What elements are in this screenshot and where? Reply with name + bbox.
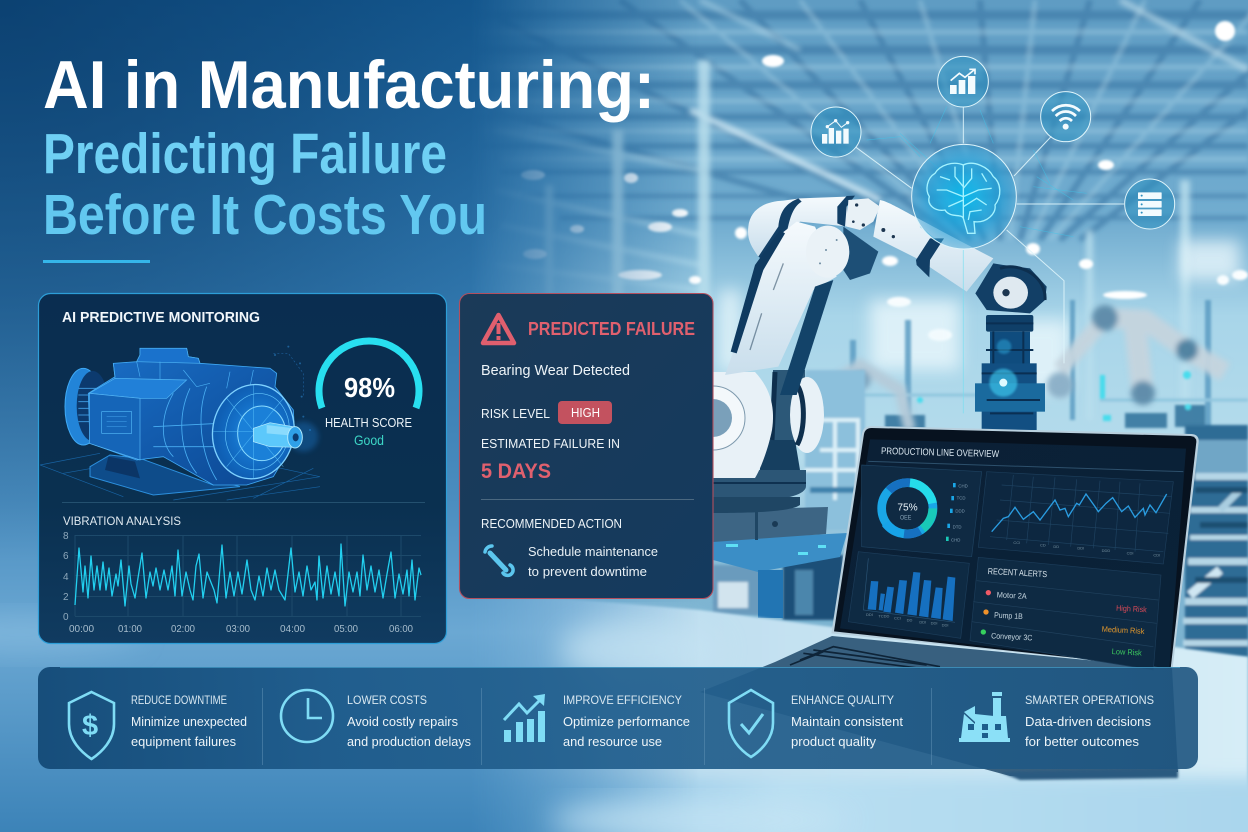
recommended action: Schedule maintenance — [528, 544, 658, 559]
recommended action — [481, 516, 658, 579]
icon: wrench — [485, 546, 513, 575]
icon: factory — [959, 692, 1010, 742]
laptop — [700, 426, 1199, 780]
benefit: lower costs: and production delays — [347, 734, 471, 749]
recent alerts: RECENT ALERTS — [988, 566, 1048, 579]
brain hub — [912, 144, 1016, 249]
y axis labels: 2 — [63, 592, 69, 603]
recent alerts: Medium Risk — [1102, 625, 1145, 636]
benefit: reduce downtime: Minimize unexpected — [131, 714, 247, 729]
estimated failure: ESTIMATED FAILURE IN — [481, 436, 620, 451]
background robots, blurred — [830, 305, 1225, 430]
benefit: reduce downtime — [69, 692, 247, 759]
benefit: lower costs — [281, 690, 471, 749]
title line 3: Before It Costs You — [43, 183, 487, 247]
recent alerts — [970, 557, 1161, 670]
line chart: CD — [1040, 543, 1046, 548]
health gauge: HEALTH SCORE — [325, 415, 412, 430]
line chart: CDI — [1153, 553, 1160, 558]
connector lines — [856, 107, 1124, 413]
y axis labels — [63, 531, 69, 623]
line chart: CCI — [1013, 540, 1020, 545]
bar chart: DD — [907, 617, 913, 622]
recent alerts: Motor 2A — [997, 590, 1028, 601]
benefit: smarter operations: for better outcomes — [1025, 734, 1140, 749]
motor housing — [88, 348, 295, 485]
panel: benefits bar — [38, 667, 1198, 769]
benefit: smarter operations: Data-driven decisions — [1025, 714, 1151, 729]
estimated failure: 5 DAYS — [481, 460, 551, 483]
bar chart — [848, 552, 969, 638]
x axis labels: 00:00 — [69, 623, 94, 635]
benefit: improve efficiency: Optimize performance — [563, 714, 690, 729]
ceiling and floor lights — [521, 21, 1248, 341]
line chart: DDD — [1102, 548, 1110, 553]
screen heading: PRODUCTION LINE OVERVIEW — [881, 446, 1000, 460]
bar chart: DDI — [866, 612, 873, 617]
recent alerts: Conveyor 3C — [991, 631, 1033, 643]
robot wrist — [975, 263, 1047, 313]
x axis labels: 01:00 — [118, 623, 142, 635]
ceiling structure — [470, 0, 1248, 240]
vibration signal — [75, 544, 421, 606]
donut panel: DDD — [955, 509, 965, 514]
failure type: Bearing Wear Detected — [481, 363, 630, 379]
y axis labels: 6 — [63, 551, 69, 562]
panel heading: AI PREDICTIVE MONITORING — [62, 310, 260, 326]
benefit: enhance quality — [729, 690, 903, 757]
title line 1: AI in Manufacturing: — [43, 47, 655, 123]
node: server — [1125, 179, 1175, 229]
node: top chart — [938, 56, 988, 107]
y axis labels: 8 — [63, 531, 69, 542]
robot column — [975, 315, 1045, 430]
robot pedestal — [681, 370, 847, 618]
node: left chart — [811, 107, 861, 157]
donut panel: DTD — [953, 525, 962, 530]
line chart: DD — [1053, 544, 1059, 549]
y axis labels: 4 — [63, 572, 69, 583]
table top — [0, 575, 1248, 832]
machinery behind laptop — [713, 370, 865, 620]
mid floor structures — [830, 300, 1248, 430]
panel: AI predictive monitoring — [38, 294, 446, 644]
alert heading: PREDICTED FAILURE — [528, 319, 695, 339]
robot elbow joint — [806, 226, 878, 280]
risk level: HIGH — [571, 405, 600, 420]
conveyors, right of laptop — [1183, 425, 1248, 657]
left gradient overlay — [0, 0, 760, 832]
line chart — [978, 472, 1173, 564]
robot shoulder — [748, 196, 855, 260]
x axis labels — [69, 623, 413, 635]
recommended action: RECOMMENDED ACTION — [481, 516, 622, 531]
motor flange — [205, 378, 302, 485]
benefit: lower costs: LOWER COSTS — [347, 693, 427, 707]
x axis labels: 05:00 — [334, 623, 358, 635]
motor base — [90, 455, 240, 495]
laptop base — [700, 636, 1178, 776]
title line 2: Predicting Failure — [43, 122, 447, 186]
donut panel: CHD — [951, 537, 960, 542]
vibration chart — [63, 514, 421, 635]
benefit: enhance quality: ENHANCE QUALITY — [791, 693, 894, 707]
icon: clock — [281, 690, 333, 742]
recommended action: to prevent downtime — [528, 564, 647, 579]
panel: predicted failure — [460, 294, 713, 598]
x axis labels: 06:00 — [389, 623, 413, 635]
recent alerts: Low Risk — [1112, 647, 1142, 658]
x axis labels: 03:00 — [226, 623, 250, 635]
risk level: RISK LEVEL — [481, 406, 550, 421]
health gauge — [319, 341, 419, 448]
donut panel: OEE — [900, 516, 911, 522]
motor shaft — [253, 423, 297, 447]
benefit: improve efficiency: and resource use — [563, 734, 662, 749]
node: wifi — [1041, 92, 1091, 142]
benefit: enhance quality: Maintain consistent — [791, 714, 903, 729]
donut panel: TCD — [957, 495, 966, 500]
AI network diagram — [811, 56, 1175, 413]
motor end cap — [65, 368, 113, 445]
bar chart: DDI — [919, 619, 926, 624]
robot upright arm — [725, 222, 837, 395]
robot arm — [725, 196, 1047, 430]
benefit: reduce downtime: equipment failures — [131, 734, 236, 749]
benefit: smarter operations — [959, 692, 1154, 749]
benefit: improve efficiency: IMPROVE EFFICIENCY — [563, 693, 682, 707]
recent alerts: Pump 1B — [994, 611, 1023, 621]
line chart: DDI — [1077, 545, 1084, 550]
recent alerts: High Risk — [1116, 604, 1147, 614]
risk level — [481, 401, 612, 424]
health gauge: Good — [354, 433, 384, 448]
icon: shield check — [729, 690, 773, 757]
line chart: CDI — [1127, 551, 1134, 556]
estimated failure — [481, 436, 620, 483]
chart heading: VIBRATION ANALYSIS — [63, 514, 181, 528]
bar chart: DDI — [942, 623, 949, 628]
laptop keyboard — [790, 647, 940, 668]
icon: shield dollar — [69, 692, 114, 759]
health gauge: 98% — [344, 372, 395, 403]
benefit: improve efficiency — [504, 693, 690, 749]
bar chart: CCI — [894, 615, 901, 620]
donut panel — [862, 465, 982, 557]
benefit: reduce downtime: REDUCE DOWNTIME — [131, 693, 227, 707]
title — [43, 47, 655, 247]
laptop screen bezel — [831, 426, 1199, 668]
bar chart: TCDD — [878, 613, 890, 618]
title underline — [43, 260, 150, 263]
icon: warning triangle — [483, 315, 514, 343]
benefit: enhance quality: product quality — [791, 734, 876, 749]
motor illustration — [40, 346, 320, 500]
x axis labels: 04:00 — [280, 623, 305, 635]
donut panel: 75% — [897, 502, 918, 513]
y axis labels: 0 — [63, 612, 69, 623]
donut panel: CHD — [958, 483, 968, 488]
icon: shield dollar: $ — [82, 710, 98, 742]
robot forearm — [847, 198, 993, 292]
benefit: smarter operations: SMARTER OPERATIONS — [1025, 693, 1154, 707]
x axis labels: 02:00 — [171, 623, 195, 635]
benefit: lower costs: Avoid costly repairs — [347, 714, 458, 729]
icon: rising chart — [504, 694, 545, 742]
bar chart: DDI — [931, 621, 938, 626]
